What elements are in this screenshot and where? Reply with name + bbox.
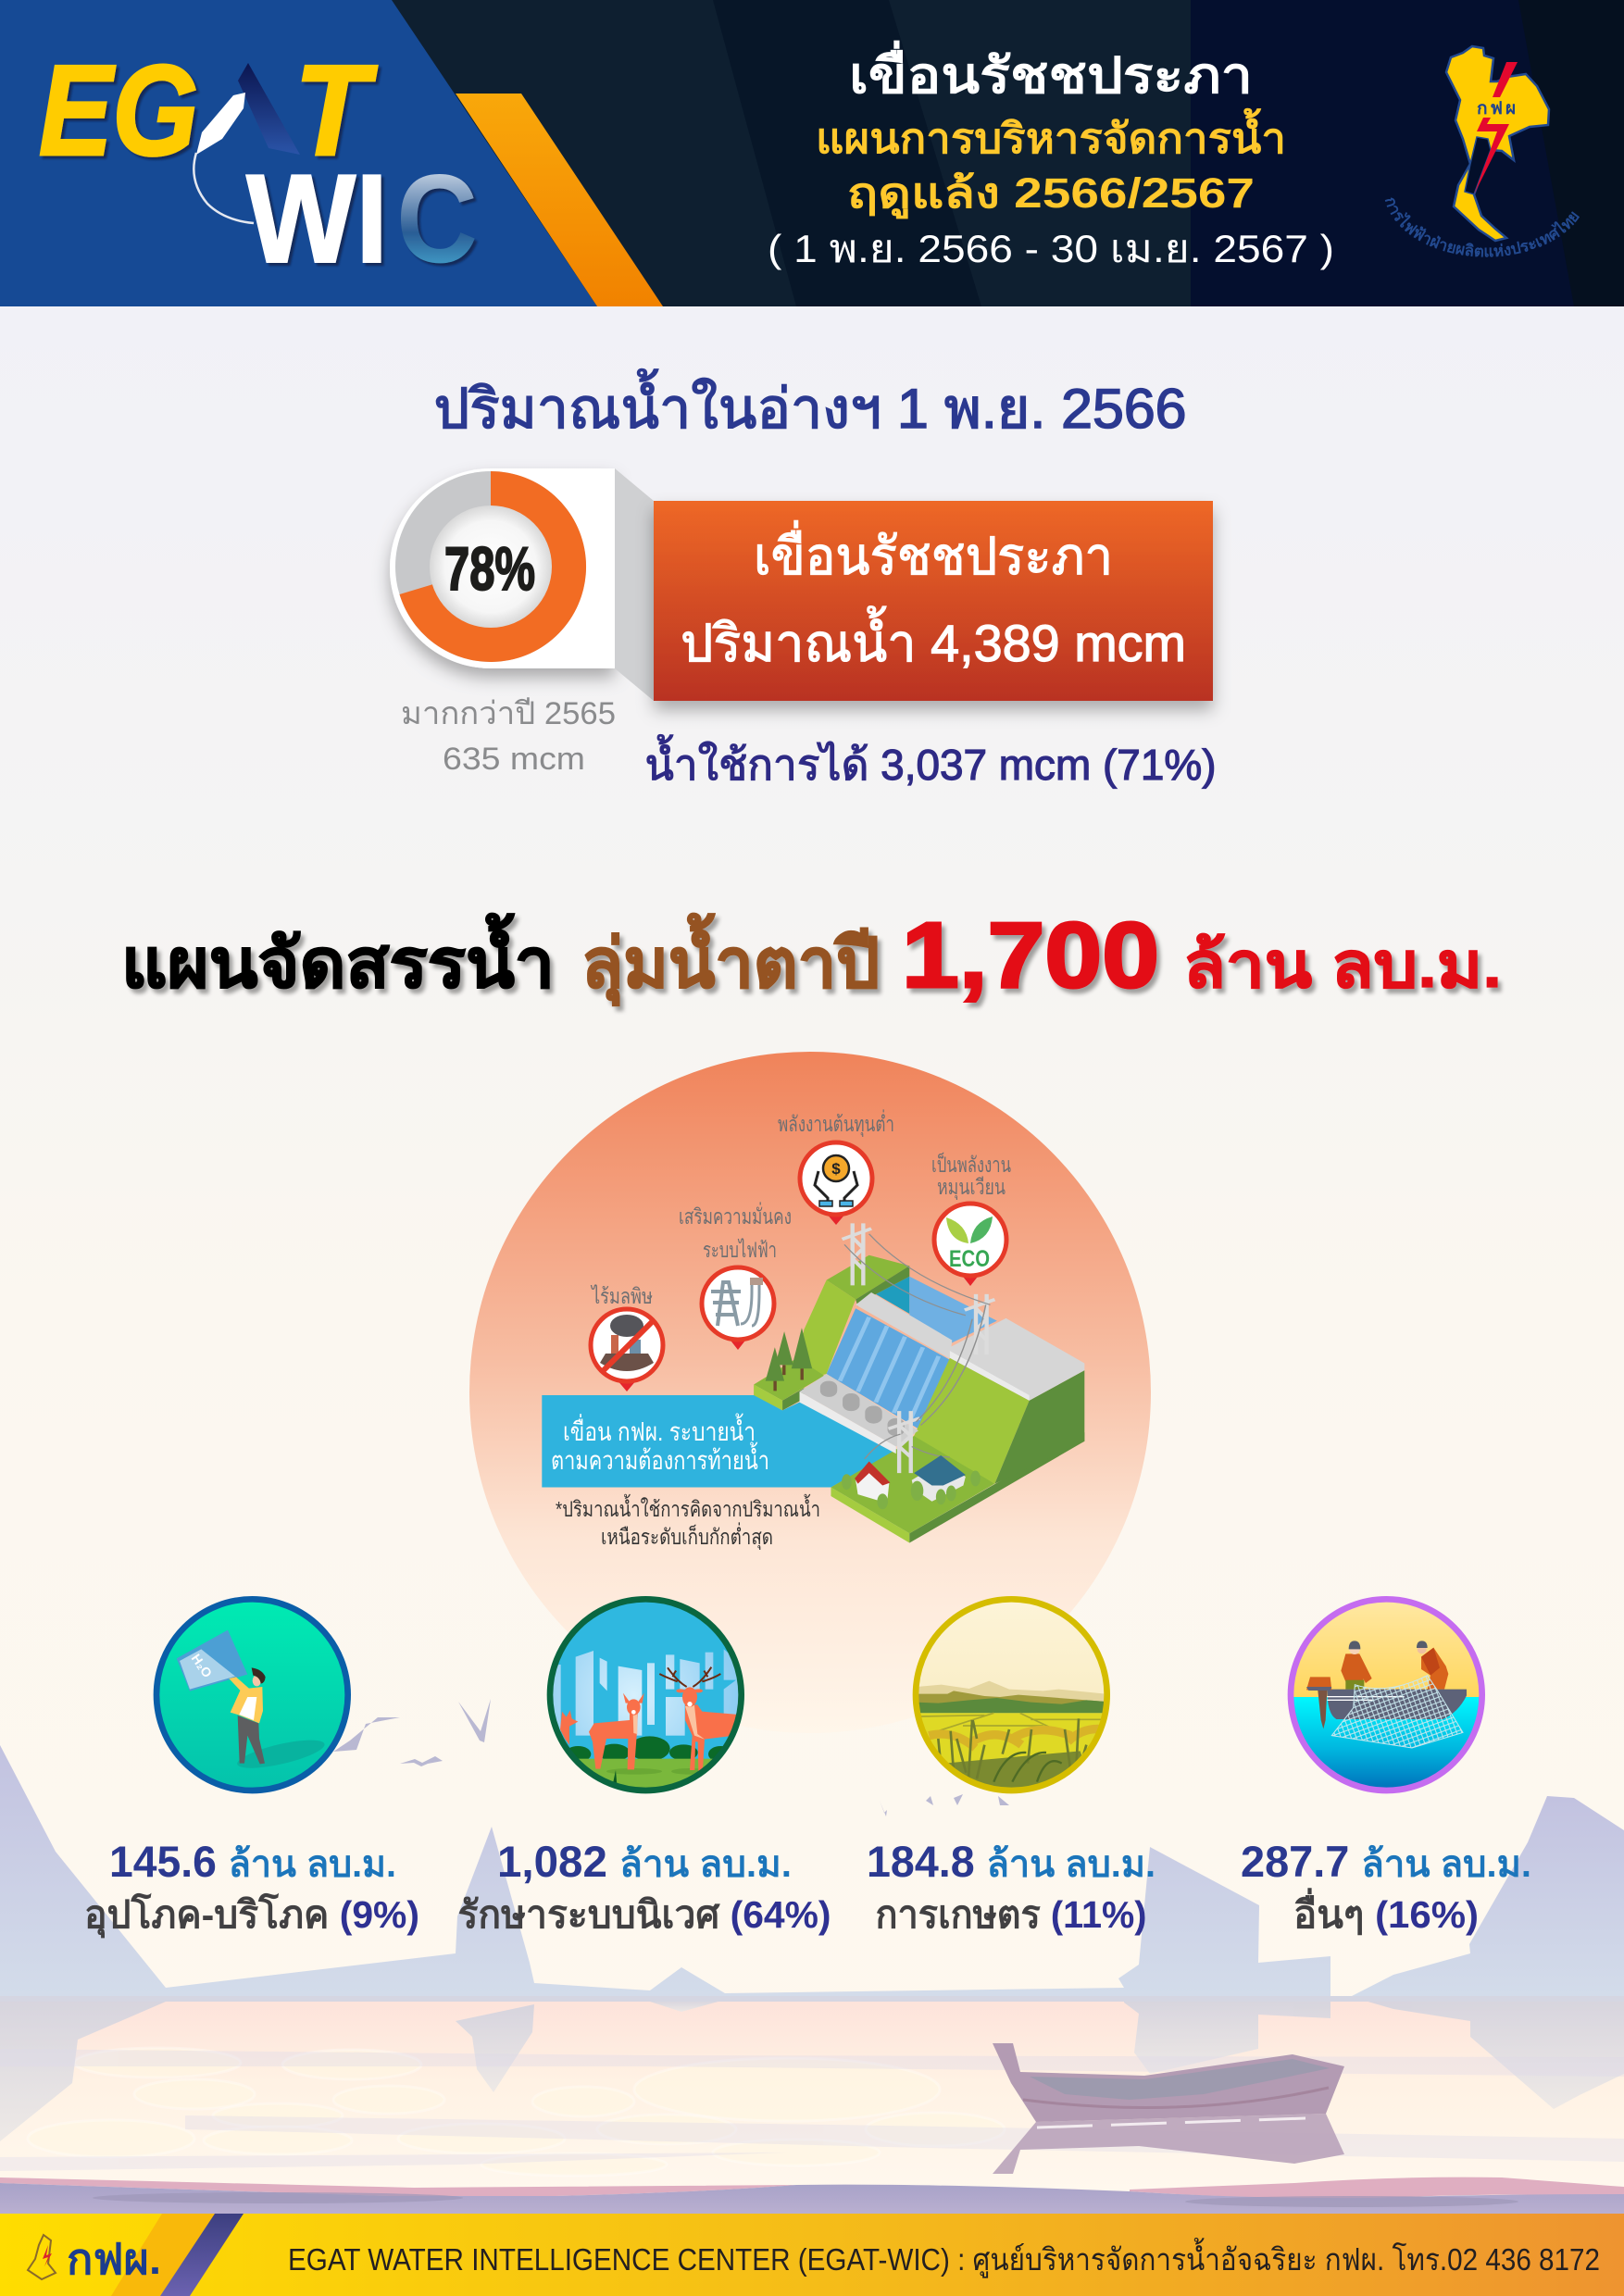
usable water: น้ำใช้การได้ 3,037 mcm (71%) [644, 734, 1217, 789]
footnote: *ปริมาณน้ำใช้การคิดจากปริมาณน้ำ [556, 1494, 820, 1521]
heading: allocation plan: 1,700 [902, 904, 1159, 1007]
pin: no pollution [591, 1309, 663, 1391]
fisherman right [1421, 1648, 1448, 1690]
logo: EGAT WIC: C [396, 148, 478, 289]
heading: allocation plan: ล้าน ลบ.ม. [1183, 930, 1502, 1001]
water label: เขื่อน กฟผ. ระบายน้ำ [563, 1413, 756, 1446]
value: ecosystem: 1,082 ล้าน ลบ.ม. [497, 1837, 792, 1886]
water surface [0, 1996, 1624, 2214]
pin: power stability [702, 1267, 774, 1350]
footnote [556, 1494, 820, 1550]
label: power stability: ระบบไฟฟ้า [703, 1238, 777, 1262]
panel: large dam circle [469, 1052, 1151, 1733]
logo: EGAT WIC: EG [39, 39, 198, 182]
footer band [0, 2214, 1624, 2296]
EGAT emblem: Thailand map [1385, 44, 1580, 257]
tree platform [754, 1358, 824, 1401]
young deer [589, 1709, 638, 1769]
birds [333, 1699, 1009, 1816]
footnote: เหนือระดับเก็บกักต่ำสุด [601, 1522, 773, 1550]
label: ecosystem: รักษาระบบนิเวศ (64%) [457, 1893, 831, 1936]
logo: EGAT WIC: WI [246, 148, 388, 289]
pin: low-cost energy [800, 1142, 872, 1225]
water ripple cells [28, 2048, 1005, 2176]
landscape background [0, 1745, 1624, 2214]
rocks [0, 1745, 1624, 1996]
small deer [560, 1710, 578, 1745]
pin: low-cost energy: $ [831, 1160, 841, 1178]
heading: allocation plan [121, 904, 1502, 1007]
water label [551, 1413, 769, 1475]
value: other uses: 287.7 ล้าน ลบ.ม. [1241, 1837, 1531, 1886]
heading: allocation plan: แผนจัดสรรน้ำ [121, 913, 555, 1002]
icon: ecosystem [550, 1599, 743, 1791]
logo: EGAT [28, 2235, 161, 2283]
header title block [768, 40, 1334, 270]
label: other uses: อื่นๆ (16%) [1293, 1888, 1479, 1936]
gray fold [615, 468, 654, 701]
orange box: ปริมาณน้ำ 4,389 mcm [681, 606, 1186, 672]
value: agriculture: 184.8 ล้าน ลบ.ม. [867, 1837, 1156, 1886]
pin: renewable energy [934, 1204, 1006, 1286]
logo: EGAT: กฟผ. [67, 2235, 161, 2283]
comparison note [401, 696, 616, 777]
boat [993, 2043, 1344, 2174]
orange diagonal strip [456, 94, 663, 306]
donut chart 78% [395, 471, 586, 662]
boat [1327, 1690, 1467, 1719]
subtitle: plan: แผนการบริหารจัดการน้ำ [816, 107, 1286, 162]
label: consumption: อุปโภค-บริโภค (9%) [84, 1892, 419, 1939]
left hill [827, 1255, 909, 1300]
label: no pollution: ไร้มลพิษ [590, 1284, 653, 1308]
outboard motor [1306, 1677, 1331, 1690]
label: power stability: เสริมความมั่นคง [679, 1202, 792, 1229]
mist bands [0, 2049, 1624, 2171]
icon: water use: H₂O [189, 1651, 215, 1680]
dam crest [856, 1292, 952, 1359]
downstream water [542, 1395, 898, 1487]
logo: EGAT WIC [39, 39, 478, 289]
trees [766, 1328, 812, 1381]
stag [685, 1704, 739, 1771]
label: renewable energy: หมุนเวียน [937, 1175, 1006, 1200]
icon: other uses [1291, 1599, 1483, 1791]
label: renewable energy: เป็นพลังงาน [931, 1151, 1011, 1177]
fisherman left [1341, 1653, 1372, 1683]
houses [856, 1463, 889, 1504]
heading: reservoir volume: ปริมาณน้ำในอ่างฯ 1 พ.ย. 2566 [433, 368, 1187, 440]
dam illustration [542, 1223, 1084, 1543]
right slope [914, 1358, 1030, 1484]
spillway [827, 1308, 950, 1429]
EGAT emblem: Thailand map: การไฟฟ้าฝ่ายผลิตแห่งประเทศไทย [1385, 198, 1580, 257]
title: dam name: เขื่อนรัชชประภา [849, 40, 1253, 104]
EGAT emblem: Thailand map: กฟผ [1477, 99, 1518, 119]
label: power stability [679, 1202, 792, 1262]
value: consumption: 145.6 ล้าน ลบ.ม. [109, 1837, 396, 1886]
pin: renewable energy: ECO [949, 1246, 990, 1272]
towers [843, 1223, 994, 1473]
reservoir [876, 1277, 909, 1314]
date range: ( 1 พ.ย. 2566 - 30 เม.ย. 2567 ) [768, 227, 1334, 270]
icon: water use [156, 1599, 348, 1791]
icon: agriculture [916, 1599, 1108, 1791]
powerhouse [800, 1374, 918, 1446]
horizon band [0, 1996, 1624, 2002]
white donut plate [390, 468, 615, 668]
orange box: เขื่อนรัชชประภา [754, 520, 1113, 585]
panel: storage volume [390, 468, 1213, 701]
label: agriculture: การเกษตร (11%) [876, 1893, 1146, 1936]
bottom platform [831, 1487, 909, 1543]
donut chart 78%: 78% [444, 534, 535, 603]
label: low-cost energy: พลังงานต้นทุนต่ำ [778, 1109, 894, 1137]
comparison note: 635 mcm [443, 742, 585, 777]
net [1331, 1676, 1463, 1748]
rock reflections [0, 1996, 1624, 2141]
subtitle: season: ฤดูแล้ง 2566/2567 [847, 169, 1255, 219]
heading: allocation plan: ลุ่มน้ำตาปี [581, 913, 880, 1006]
label: renewable energy [931, 1151, 1011, 1200]
orange box [654, 501, 1213, 701]
comparison note: มากกว่าปี 2565 [401, 696, 616, 731]
water label: ตามความต้องการท้ายน้ำ [551, 1441, 769, 1475]
shoreline [0, 2177, 796, 2196]
logo: EGAT WIC: T [294, 39, 377, 182]
header band [0, 0, 1624, 306]
